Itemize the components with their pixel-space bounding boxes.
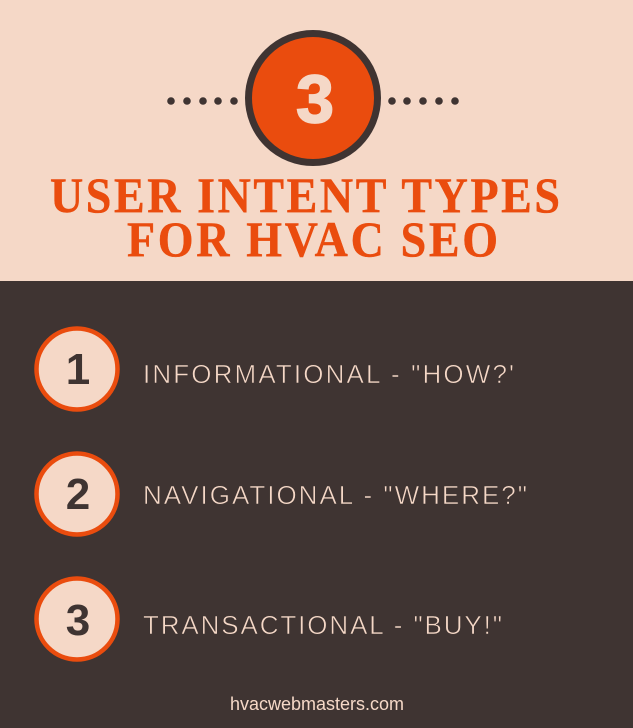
list item 3: transactional: TRANSACTIONAL - "BUY!" [143, 610, 502, 640]
list item 1: informational [36, 328, 514, 410]
list item 2: navigational: 2 [66, 470, 90, 519]
title [50, 168, 560, 267]
list item 1: informational: INFORMATIONAL - "HOW?' [143, 359, 514, 389]
list item 1: informational: 1 [66, 345, 90, 394]
left dotted line [167, 97, 238, 105]
title: USER INTENT TYPES [50, 168, 560, 223]
list item 2: navigational [36, 454, 527, 534]
list item 3: transactional [36, 578, 502, 660]
panel: dark list background [0, 281, 633, 728]
badge: large number 3: 3 [296, 61, 334, 137]
title: FOR HVAC SEO [127, 212, 498, 267]
footer website: hvacwebmasters.com [230, 694, 404, 714]
right dotted line [388, 97, 459, 105]
list item 3: transactional: 3 [66, 596, 90, 645]
panel: header background [0, 0, 633, 281]
badge: large number 3 [248, 34, 378, 162]
list item 2: navigational: NAVIGATIONAL - "WHERE?" [143, 480, 527, 510]
